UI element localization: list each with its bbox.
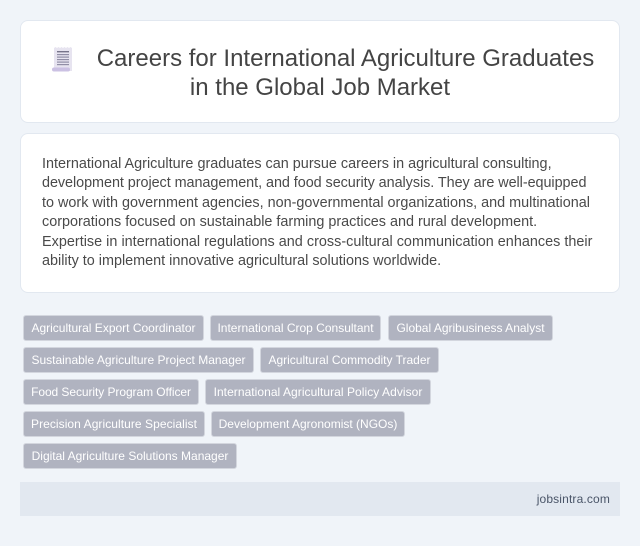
text block: description: Expertise in international regulations and cross-cultural communication enhances their [42, 234, 592, 250]
chip [23, 379, 199, 405]
chip: Global Agribusiness Analyst [396, 321, 545, 335]
chip [23, 411, 205, 437]
title: Careers for International Agriculture Graduates [97, 45, 594, 72]
chip [210, 315, 381, 341]
chip: International Agricultural Policy Advisor [214, 385, 422, 399]
chip: Sustainable Agriculture Project Manager [31, 353, 246, 367]
footer source text: jobsintra.com [537, 492, 610, 506]
title: in the Global Job Market [190, 74, 450, 101]
chip [205, 379, 431, 405]
icon: document scroll [52, 47, 72, 72]
chip: Agricultural Export Coordinator [31, 321, 196, 335]
chip list: job titles [23, 315, 553, 469]
title [97, 45, 594, 101]
chip [260, 347, 439, 373]
chip [388, 315, 553, 341]
panel: title card [20, 20, 620, 123]
text block: description: development project management, and food security analysis. They are well-equipped [42, 175, 586, 191]
chip: Development Agronomist (NGOs) [219, 417, 397, 431]
text block: description: to work with government agencies, non-governmental organizations, and multinational [42, 195, 590, 211]
chip: International Crop Consultant [217, 321, 374, 335]
panel: description [20, 133, 620, 293]
chip: Agricultural Commodity Trader [268, 353, 431, 367]
footer bar [20, 482, 620, 516]
chip: Food Security Program Officer [31, 385, 191, 399]
text block: description: International Agriculture graduates can pursue careers in agricultural consulting, [42, 156, 552, 172]
chip [211, 411, 405, 437]
chip: Digital Agriculture Solutions Manager [32, 449, 228, 463]
chip: Precision Agriculture Specialist [31, 417, 197, 431]
chip [23, 443, 237, 469]
text block: description [42, 156, 592, 269]
text block: description: corporations focused on sustainable farming practices and rural development. [42, 214, 537, 230]
chip [23, 347, 254, 373]
text block: description: ability to implement innovative agricultural solutions worldwide. [42, 253, 441, 269]
chip [23, 315, 204, 341]
